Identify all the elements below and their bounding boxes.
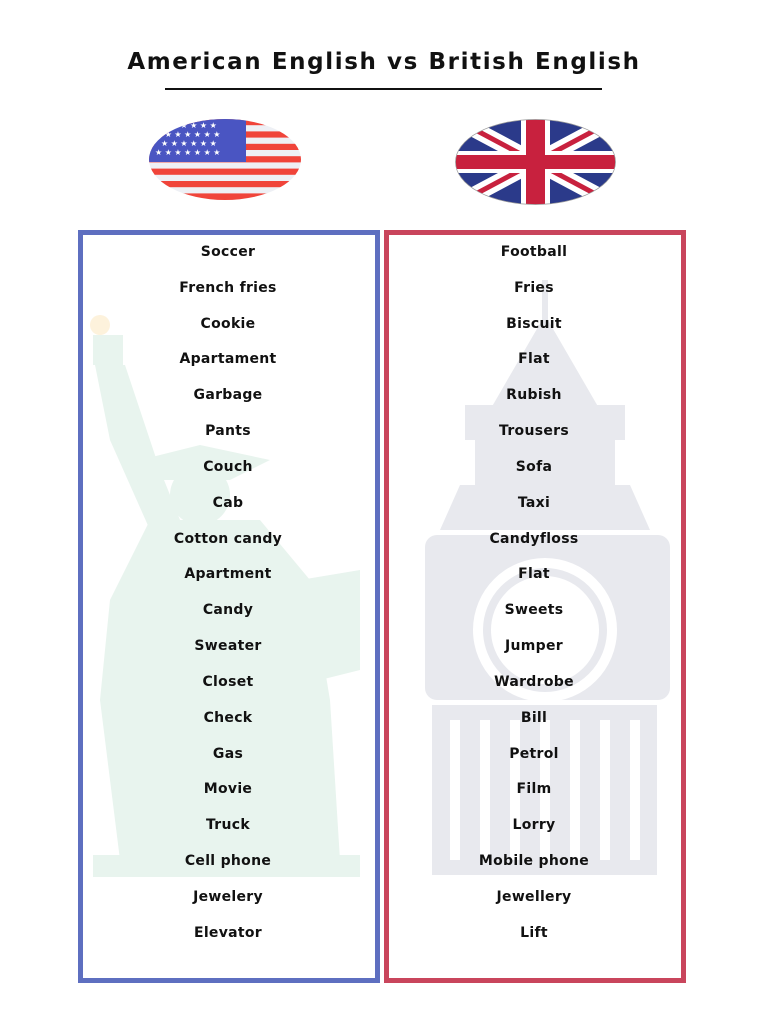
british word list: Biscuit (506, 316, 562, 332)
american word list: Couch (203, 459, 253, 475)
american word list: Jewelery (193, 889, 263, 905)
american word list: Truck (206, 817, 250, 833)
icon: US flag (149, 119, 301, 200)
british word list: Bill (521, 710, 547, 726)
british word list: Lorry (512, 817, 555, 833)
american word list: Cotton candy (174, 531, 282, 547)
british word list: Flat (518, 566, 550, 582)
british word list: Rubish (506, 387, 562, 403)
icon: US flag: ★ ★ ★ ★ ★ ★ (161, 121, 217, 130)
british word list: Mobile phone (479, 853, 589, 869)
british word list: Lift (520, 925, 548, 941)
illustration: big ben (425, 280, 670, 875)
american word list: Sweater (194, 638, 262, 654)
british word list: Taxi (518, 495, 550, 511)
american word list: Gas (213, 746, 243, 762)
american word list: Candy (203, 602, 253, 618)
american word list: Apartment (184, 566, 272, 582)
american word list: Closet (202, 674, 254, 690)
panel: british box (384, 230, 686, 983)
british word list: Sofa (516, 459, 552, 475)
british word list: Flat (518, 351, 550, 367)
british word list: Trousers (499, 423, 569, 439)
british word list: Wardrobe (494, 674, 574, 690)
american word list (174, 244, 282, 941)
british word list: Candyfloss (489, 531, 578, 547)
icon: US flag: ★ ★ ★ ★ ★ ★ ★ (155, 130, 220, 139)
british word list: Film (517, 781, 551, 797)
american word list: Soccer (201, 244, 255, 260)
american word list: Check (204, 710, 252, 726)
british word list: Football (501, 244, 567, 260)
british word list: Fries (514, 280, 554, 296)
american word list: Pants (205, 423, 251, 439)
british word list: Petrol (509, 746, 559, 762)
american word list: Apartament (179, 351, 277, 367)
icon: US flag: ★ ★ ★ ★ ★ ★ (161, 139, 217, 148)
american word list: French fries (179, 280, 277, 296)
british word list (479, 244, 589, 941)
british word list: Sweets (505, 602, 563, 618)
american word list: Garbage (194, 387, 262, 403)
icon: UK flag (455, 119, 616, 205)
american word list: Cab (213, 495, 243, 511)
title: American English vs British English (127, 49, 641, 75)
american word list: Cell phone (185, 853, 271, 869)
panel: american box (78, 230, 380, 983)
british word list: Jumper (505, 638, 563, 654)
icon: US flag: ★ ★ ★ ★ ★ ★ ★ (155, 148, 220, 157)
american word list: Elevator (194, 925, 262, 941)
british word list: Jewellery (497, 889, 571, 905)
american word list: Cookie (201, 316, 255, 332)
illustration: statue of liberty (90, 315, 360, 877)
american word list: Movie (204, 781, 252, 797)
